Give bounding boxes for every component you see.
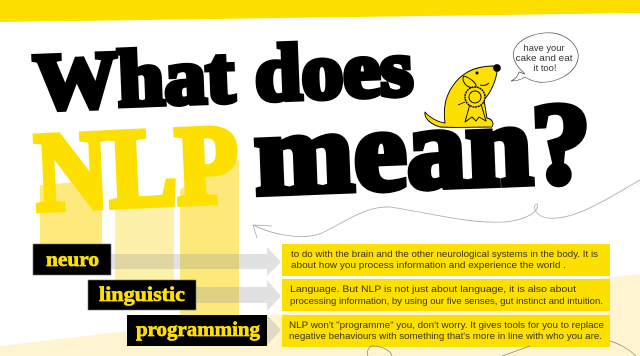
text box: programming: negative behaviours with something that's more in line with who you are. xyxy=(289,331,602,342)
text box: programming xyxy=(282,315,610,347)
label: neuro xyxy=(33,244,111,275)
label: linguistic xyxy=(88,280,196,310)
text box: programming: NLP won't "programme" you, don't worry. It gives tools for you to replace xyxy=(289,320,604,331)
title line: mean?: mean? xyxy=(252,79,594,220)
speech bubble: it too! xyxy=(534,63,556,73)
column: neuro xyxy=(40,180,102,245)
column: linguistic xyxy=(115,194,174,280)
text box: neuro: to do with the brain and the other neurological systems in the body. It is xyxy=(291,249,598,260)
arrow: programming xyxy=(267,315,281,345)
text box: neuro xyxy=(282,244,610,276)
label: linguistic: linguistic xyxy=(99,282,185,306)
text box: linguistic xyxy=(282,279,610,311)
label: neuro: neuro xyxy=(46,247,99,271)
title line: What does: What does xyxy=(32,25,414,127)
text box: linguistic: processing information, by using our five senses, gut instinct and intuition. xyxy=(290,296,603,307)
arrow: linguistic xyxy=(196,280,281,311)
text box: linguistic: Language. But NLP is not just about language, it is also about xyxy=(290,284,576,295)
speech bubble: have your xyxy=(524,43,564,53)
label: programming: programming xyxy=(136,317,260,341)
top yellow band xyxy=(0,0,640,22)
arrow: neuro xyxy=(107,247,281,276)
title word: NLP: NLP xyxy=(33,102,241,235)
text box: neuro: about how you process information and experience the world . xyxy=(291,260,566,271)
label: programming xyxy=(127,315,267,346)
pale yellow bottom area xyxy=(0,274,640,356)
swirl arrow line xyxy=(253,180,640,238)
speech bubble: cake and eat xyxy=(516,53,573,63)
icon: dog with rosette xyxy=(425,65,500,127)
decorative scribbles, bottom xyxy=(367,341,636,356)
speech bubble xyxy=(511,33,578,82)
column: programming xyxy=(180,160,239,316)
